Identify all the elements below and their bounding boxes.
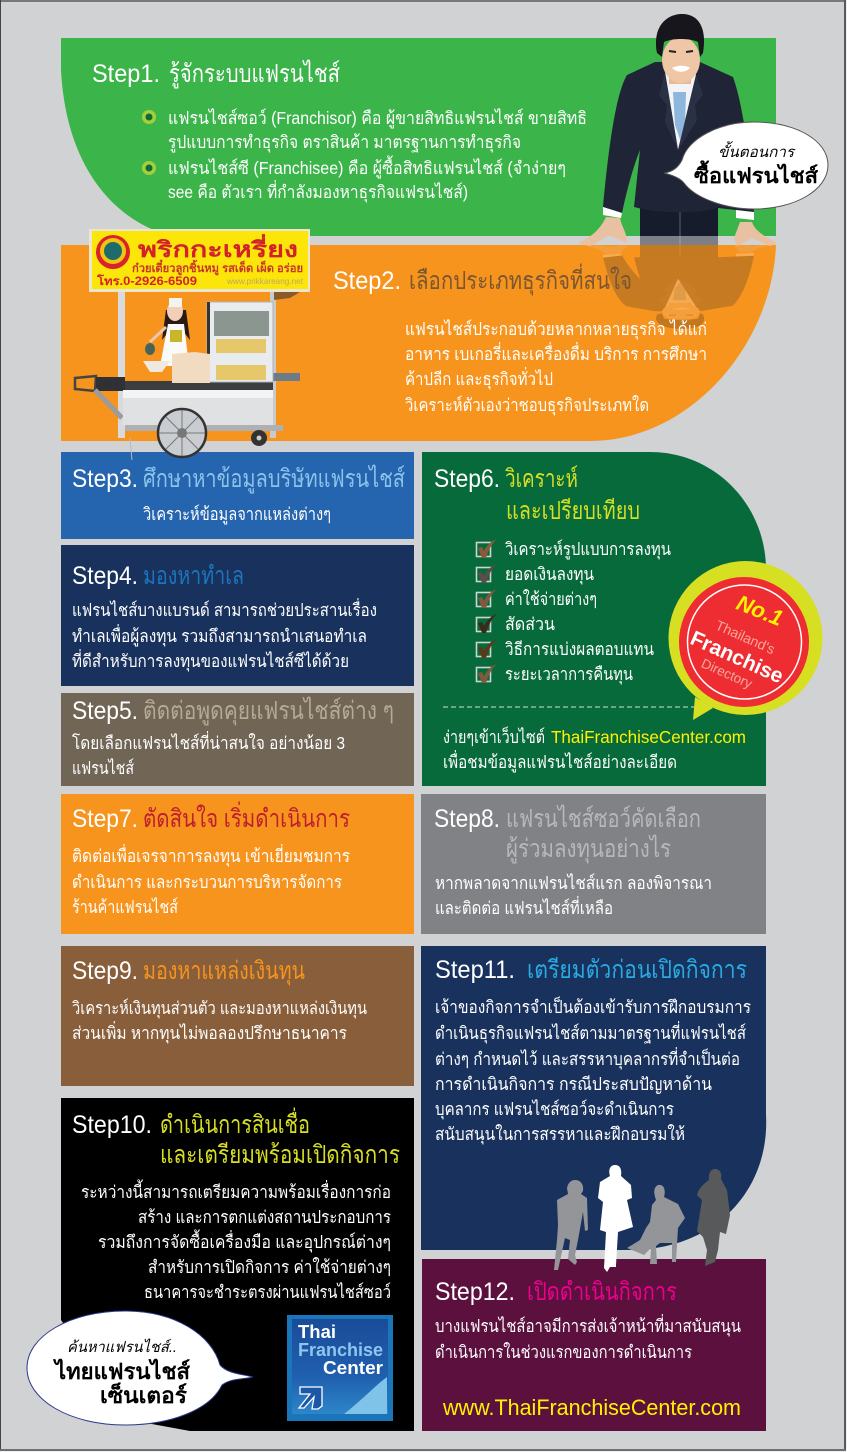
reflection of businessman (578, 243, 777, 329)
heading: step 3: Step3. (72, 465, 138, 493)
photo: businessman leaning on table (578, 14, 777, 246)
speech bubble: search (27, 1311, 253, 1425)
text: step 11: ต่างๆ กำหนดไว้ และสรรหาบุคลากรที่จำเป็นต่อ (435, 1047, 740, 1070)
badge: no.1 directory: Franchise (687, 627, 787, 688)
bullet: franchisor (142, 110, 156, 124)
text: step 7: ร้านค้าแฟรนไชส์ (72, 897, 178, 917)
speech bubble: search: ค้นหาแฟรนไชส์.. (67, 1338, 177, 1356)
checklist: ยอดเงินลงทุน (505, 564, 594, 585)
heading: step 5: Step5. (72, 697, 138, 725)
heading: step 6: วิเคราะห์ (505, 465, 578, 493)
checklist: วิเคราะห์รูปแบบการลงทุน (505, 539, 671, 560)
checklist: วิธีการแบ่งผลตอบแทน (505, 639, 654, 659)
shop sign: พริกกะเหรี่ยง (138, 233, 298, 262)
speech bubble: search: ไทยแฟรนไชส์ (53, 1358, 191, 1384)
panel: step 10 (61, 1098, 414, 1431)
badge: no.1 directory: No.1 (733, 590, 787, 631)
shop sign: โทร.0-2926-6509 (96, 273, 197, 288)
heading: step 8: Step8. (434, 805, 500, 833)
heading: step 8: ผู้ร่วมลงทุนอย่างไร (506, 834, 671, 864)
heading: step 2 (333, 263, 632, 296)
heading: step 10: และเตรียมพร้อมเปิดกิจการ (160, 1141, 400, 1169)
text: step 8 (435, 873, 712, 918)
text: step 4: แฟรนไชส์บางแบรนด์ สามารถช่วยประสานเรื่อง (72, 598, 377, 620)
text block: step 1 (168, 108, 587, 203)
panel: step 12 (422, 1259, 766, 1431)
heading: step 12: เปิดดำเนินกิจการ (527, 1278, 677, 1306)
text block: step 1: รูปแบบการทำธุรกิจ ตราสินค้า มาตรฐานการทำธุรกิจ (168, 132, 521, 153)
text: step 4: ที่ดีสำหรับการลงทุนของแฟรนไชส์ซีได้ด้วย (72, 649, 349, 672)
heading: step 10: Step10. (72, 1111, 152, 1139)
panel: step 3 (61, 452, 414, 539)
heading: step 6: Step6. (434, 465, 500, 493)
text: step 5: แฟรนไชส์ (72, 758, 134, 778)
text: visit website (443, 726, 746, 773)
text: step 3: วิเคราะห์ข้อมูลจากแหล่งต่างๆ (143, 504, 331, 525)
panel: step 2 (61, 243, 777, 441)
heading: step 1 (92, 59, 340, 89)
badge: no.1 directory: Directory (699, 656, 755, 691)
text: step 10: ระหว่างนี้สามารถเตรียมความพร้อมเรื่องการก่อ (81, 1179, 391, 1202)
heading: step 9: มองหาแหล่งเงินทุน (143, 957, 305, 986)
text block: step 2 (405, 319, 707, 416)
checklist (476, 539, 671, 685)
panel: step 9 (61, 946, 414, 1086)
panel: step 6 (422, 452, 766, 786)
heading: step 7 (72, 801, 350, 833)
text: step 7: ดำเนินการ และกระบวนการบริหารจัดการ (72, 872, 342, 892)
speech bubble: step intro (664, 122, 828, 209)
text: step 4 (72, 598, 377, 672)
heading: step 3 (72, 464, 405, 494)
text: step 10 (81, 1179, 391, 1302)
heading: step 8 (434, 804, 701, 864)
panel: step 1 (61, 38, 776, 236)
heading: step 3: ศึกษาหาข้อมูลบริษัทแฟรนไชส์ (143, 464, 405, 494)
text: step 11: ดำเนินธุรกิจแฟรนไชส์ตามมาตรฐานที่แฟรนไชส์ (435, 1021, 746, 1044)
text: step 9: วิเคราะห์เงินทุนส่วนตัว และมองหาแหล่งเงินทุน (72, 998, 367, 1019)
heading: step 11: Step11. (435, 956, 515, 984)
text block: step 2: อาหาร เบเกอรี่และเครื่องดื่ม บริการ การศึกษา (405, 342, 707, 364)
icon: arrow (299, 1387, 322, 1409)
shop sign: ก๋วยเตี๋ยวลูกชิ้นหมู รสเด็ด เผ็ด อร่อย (132, 258, 303, 276)
text block: step 2: ค้าปลีก และธุรกิจทั่วไป (405, 367, 553, 390)
heading: step 7: Step7. (72, 805, 138, 833)
text: step 8: และติดต่อ แฟรนไชส์ที่เหลือ (435, 896, 613, 918)
text: step 5 (72, 731, 345, 778)
heading: step 5: ติดต่อพูดคุยแฟรนไชส์ต่าง ๆ (143, 696, 394, 726)
shop sign: www.prikkareang.net (226, 276, 304, 286)
speech bubble: step intro: ขั้นตอนการ (718, 141, 796, 161)
heading: step 5 (72, 696, 394, 726)
text: step 11: บุคลากร แฟรนไชส์ซอว์จะดำเนินการ (435, 1099, 674, 1120)
heading: step 11: เตรียมตัวก่อนเปิดกิจการ (527, 956, 747, 984)
heading: step 10 (72, 1107, 400, 1169)
heading: step 8: แฟรนไชส์ซอว์คัดเลือก (506, 804, 701, 833)
heading: step 9 (72, 957, 305, 986)
logo: thai franchise center: Center (323, 1358, 383, 1378)
text: visit website: ThaiFranchiseCenter.com (551, 727, 746, 747)
heading: step 10: ดำเนินการสินเชื่อ (160, 1107, 310, 1139)
heading: step 12: Step12. (435, 1278, 515, 1306)
website url: www.ThaiFranchiseCenter.com (442, 1395, 741, 1420)
logo: thai franchise center: Thai (298, 1322, 336, 1342)
text block: step 1: แฟรนไชส์ซี (Franchisee) คือ ผู้ซื้อสิทธิแฟรนไชส์ (จำง่ายๆ (168, 155, 566, 179)
text: step 10: สร้าง และการตกแต่งสถานประกอบการ (138, 1207, 391, 1227)
person 4 (697, 1169, 730, 1266)
woman vendor (143, 298, 190, 372)
text: step 11 (435, 996, 751, 1145)
heading: step 12 (435, 1278, 677, 1306)
text: step 10: สำหรับการเปิดกิจการ ค่าใช้จ่ายต่างๆ (148, 1257, 391, 1277)
heading: step 2: เลือกประเภทธุรกิจที่สนใจ (409, 263, 632, 296)
cart frame (75, 291, 300, 460)
panel: step 8 (421, 794, 766, 934)
heading: step 4 (72, 562, 244, 590)
speech bubble: step intro: ซื้อแฟรนไชส์ (694, 160, 818, 188)
text: step 7 (72, 844, 350, 917)
text: step 9: ส่วนเพิ่ม หากทุนไม่พอลองปรึกษาธนาคาร (72, 1021, 347, 1044)
heading: step 6: และเปรียบเทียบ (506, 497, 640, 525)
text block: step 2: แฟรนไชส์ประกอบด้วยหลากหลายธุรกิจ ได้แก่ (405, 319, 707, 340)
badge: no.1 directory (668, 561, 822, 720)
heading: step 4: Step4. (72, 562, 138, 590)
heading: step 9: Step9. (72, 957, 138, 985)
speech bubble: search: เซ็นเตอร์ (100, 1381, 187, 1408)
text: step 11: การดำเนินกิจการ กรณีประสบปัญหาด้าน (435, 1074, 712, 1094)
silhouettes: four people (554, 1165, 730, 1272)
text block: step 1: see คือ ตัวเรา ที่กำลังมองหาธุรกิจแฟรนไชส์) (168, 180, 468, 203)
person 2 (598, 1165, 633, 1272)
text: step 10: รวมถึงการจัดซื้อเครื่องมือ และอุปกรณ์ต่างๆ (98, 1229, 391, 1253)
shop sign (89, 229, 310, 292)
heading: step 4: มองหาทำเล (143, 562, 244, 590)
checklist: สัดส่วน (505, 614, 555, 634)
cabinet (207, 302, 273, 382)
logo: thai franchise center (287, 1315, 393, 1421)
person 3 (627, 1185, 685, 1264)
panel: step 11 (421, 946, 766, 1250)
checklist: ระยะเวลาการคืนทุน (505, 664, 633, 685)
panel: step 4 (61, 545, 414, 686)
text: step 12: บางแฟรนไชส์อาจมีการส่งเจ้าหน้าที่มาสนับสนุน (435, 1314, 741, 1337)
heading: step 11 (435, 956, 747, 984)
panel: step 5 (61, 693, 414, 786)
text: step 4: ทำเลเพื่อผู้ลงทุน รวมถึงสามารถนำเสนอทำเล (72, 624, 367, 647)
person 1 (554, 1180, 588, 1270)
badge: no.1 directory: Thailand's (713, 617, 778, 657)
logo: thai franchise center: Franchise (298, 1340, 383, 1360)
bullet: franchisee (142, 161, 156, 175)
text block: step 1: แฟรนไชส์ซอว์ (Franchisor) คือ ผู้ขายสิทธิแฟรนไชส์ ขายสิทธิ (168, 108, 587, 129)
checklist: ค่าใช้จ่ายต่างๆ (505, 589, 597, 609)
text: step 11: สนับสนุนในการสรรหาและฝึกอบรมให้ (435, 1124, 685, 1145)
heading: step 1: Step1. (92, 60, 160, 88)
heading: step 7: ตัดสินใจ เริ่มดำเนินการ (143, 801, 350, 833)
text: step 9 (72, 998, 367, 1044)
illustration: food cart (75, 229, 310, 460)
sign logo (96, 235, 130, 269)
text: step 7: ติดต่อเพื่อเจรจาการลงทุน เข้าเยี่ยมชมการ (72, 844, 350, 867)
panel: step 7 (61, 794, 414, 934)
wheels (158, 409, 267, 457)
text: visit website: เพื่อชมข้อมูลแฟรนไชส์อย่างละเอียด (443, 750, 677, 773)
text: step 5: โดยเลือกแฟรนไชส์ที่น่าสนใจ อย่างน้อย 3 (72, 731, 345, 753)
containers (172, 352, 210, 383)
heading: step 1: รู้จักระบบแฟรนไชส์ (169, 59, 340, 89)
text: step 12 (435, 1314, 741, 1362)
text: step 8: หากพลาดจากแฟรนไชส์แรก ลองพิจารณา (435, 873, 712, 893)
text: visit website: ง่ายๆเข้าเว็บไซต์ (443, 726, 545, 747)
heading: step 6 (434, 465, 640, 525)
text: step 11: เจ้าของกิจการจำเป็นต้องเข้ารับการฝึกอบรมการ (435, 996, 751, 1017)
text: step 10: ธนาคารจะชำระตรงผ่านแฟรนไชส์ซอว์ (144, 1282, 391, 1302)
text: step 12: ดำเนินการในช่วงแรกของการดำเนินการ (435, 1342, 692, 1362)
heading: step 2: Step2. (333, 267, 401, 295)
text block: step 2: วิเคราะห์ตัวเองว่าชอบธุรกิจประเภทใด (405, 395, 649, 416)
